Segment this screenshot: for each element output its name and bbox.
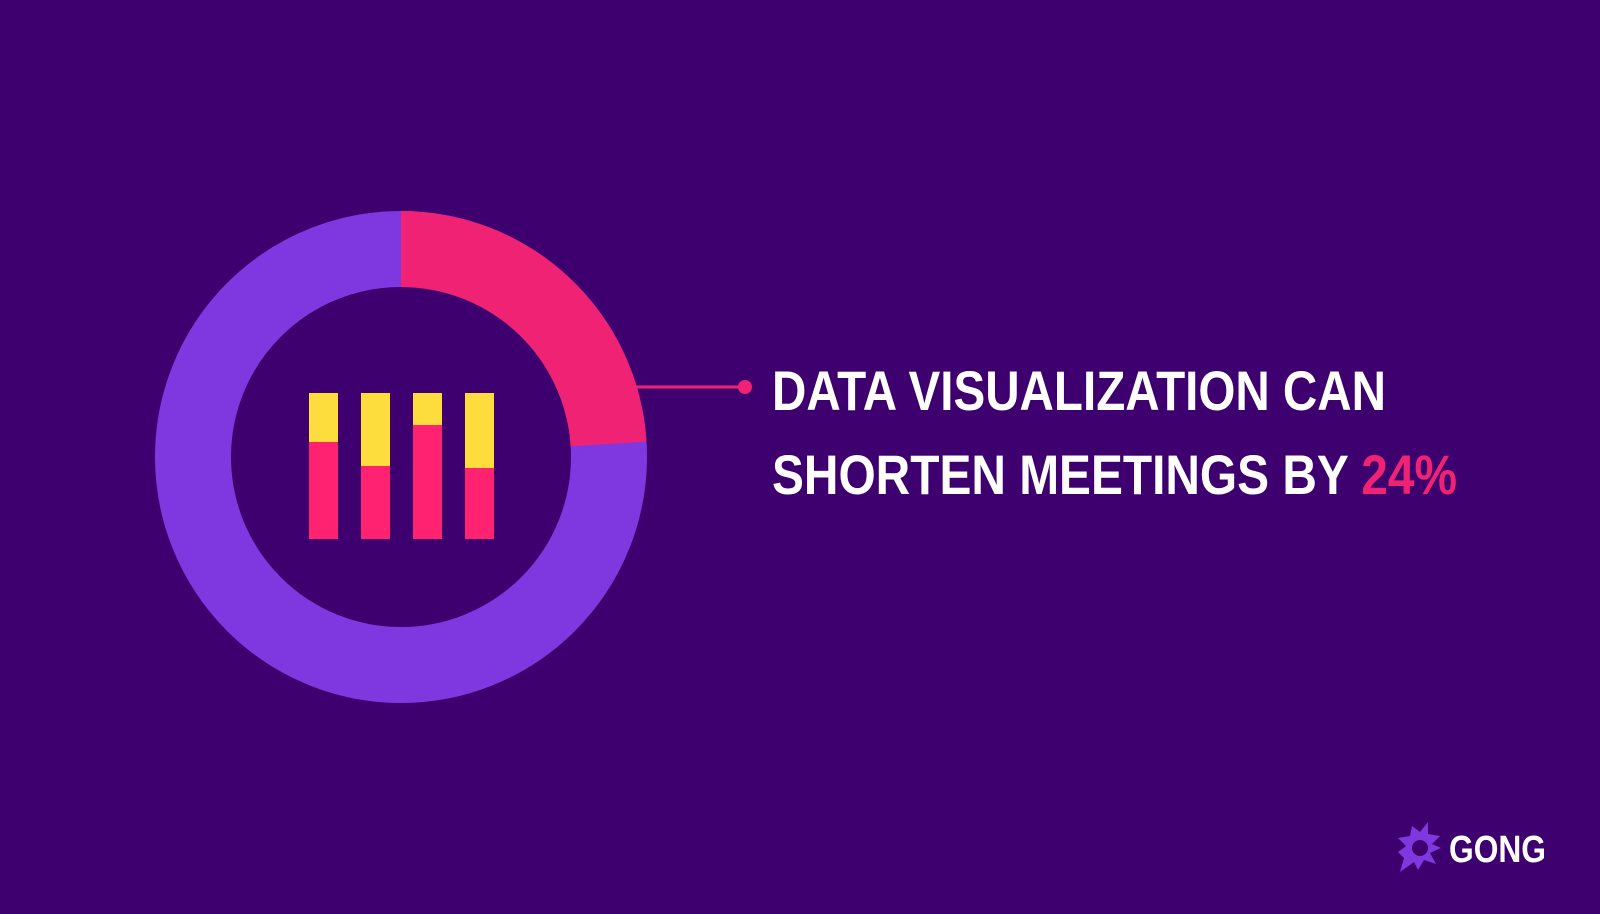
headline text [772,359,1457,506]
logo: GONG: GONG [1449,829,1546,871]
logo: GONG [1398,822,1546,872]
headline text: SHORTEN MEETINGS BY 24% [772,443,1457,506]
headline text: DATA VISUALIZATION CAN [772,359,1386,422]
stacked bar chart icon [309,393,494,539]
donut chart [193,211,646,665]
callout connector line [636,380,752,394]
